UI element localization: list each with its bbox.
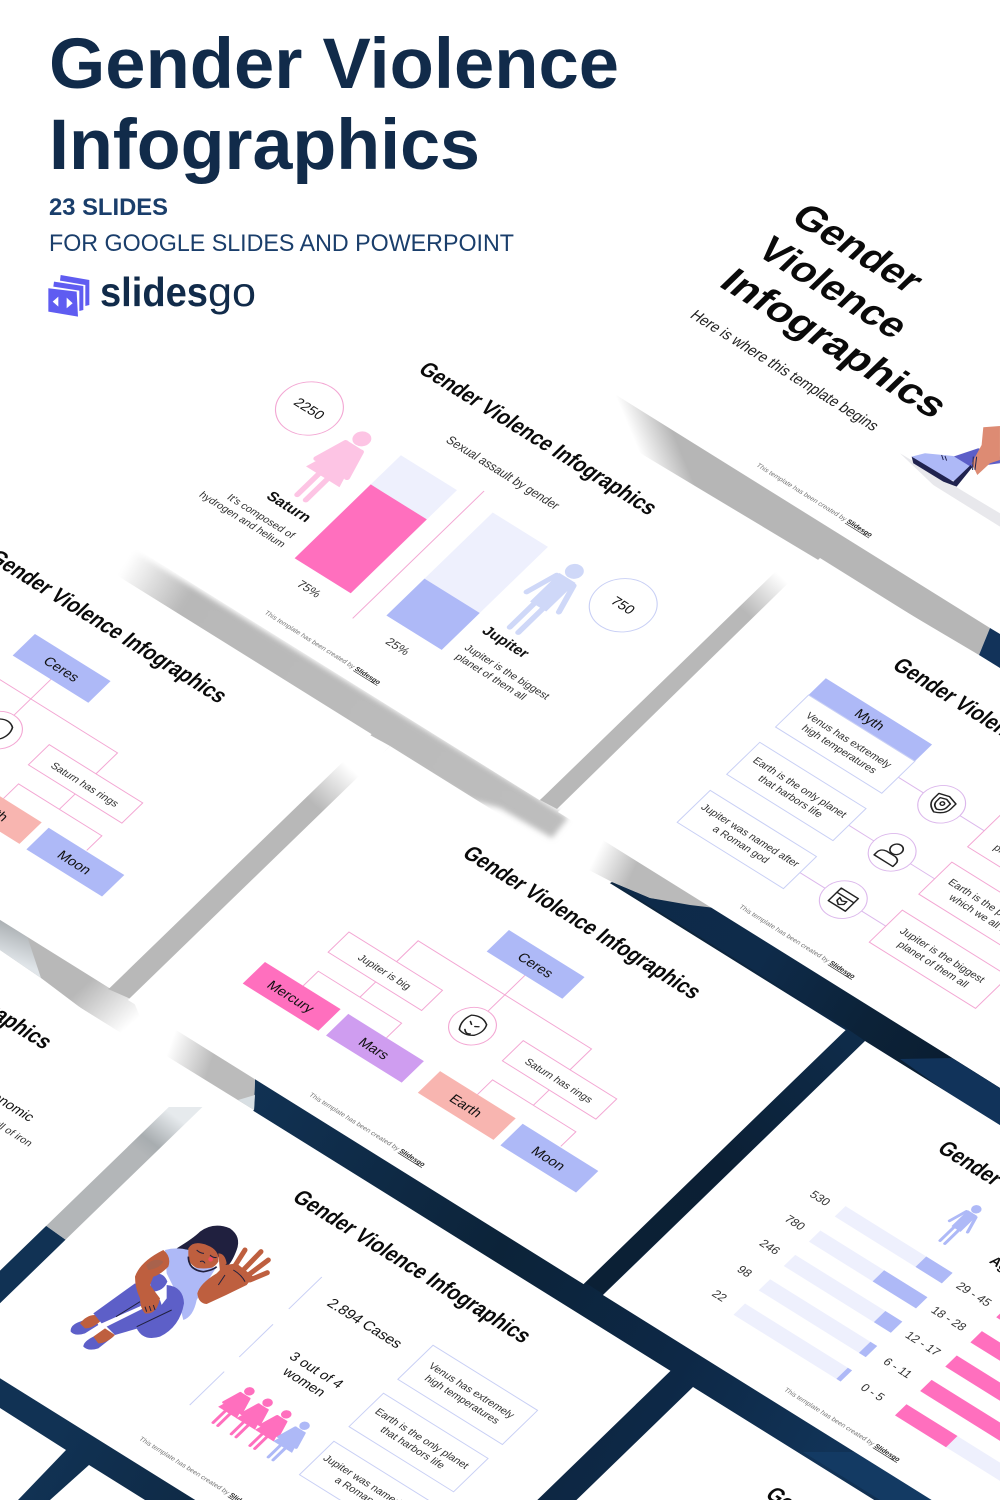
box myth header [809, 678, 932, 761]
slide title: Gender [783, 196, 932, 301]
bar chart left [734, 1206, 953, 1381]
subheading platforms: FOR GOOGLE SLIDES AND POWERPOINT [49, 230, 514, 257]
footer credit: This template has been created by Slidesgo [782, 1387, 901, 1463]
age labels [852, 1279, 995, 1407]
box Ceres: Ceres [514, 949, 557, 980]
box 3 [299, 1441, 438, 1500]
percent 25%: 25% [382, 635, 413, 658]
panel: slide age bars [603, 1041, 1000, 1500]
panel: slide bottom right partial [431, 1387, 1000, 1500]
panel: slide myth vs fact [558, 558, 1000, 1096]
shadow band under title slide [613, 393, 990, 655]
footer credit: This template has been created by Slidesgo [307, 1092, 426, 1168]
slide title: Gender Violence Infographics [458, 841, 708, 1003]
box Mars: Mars [355, 1035, 393, 1062]
subheading slide count: 23 SLIDES [49, 194, 168, 221]
heading: Infographics [49, 106, 480, 185]
box Mars [326, 1014, 424, 1083]
age labels: 18 - 28 [928, 1304, 970, 1333]
box 1: Venus has extremely [426, 1361, 518, 1421]
box Ceres: Ceres [40, 653, 83, 684]
panel: slide flow left [0, 450, 372, 988]
label Jupiter: planet of them all [452, 652, 529, 702]
bar: Saturn 75% [295, 455, 457, 593]
panel: slide flow center [128, 746, 846, 1284]
box myth 1: high temperatures [799, 723, 879, 776]
values: 98 [734, 1263, 756, 1280]
icon: shoe and hand illustration [900, 426, 1000, 527]
box 1 [398, 1345, 538, 1444]
panel: slide lower left partial [0, 796, 197, 1334]
box Ceres [13, 634, 111, 703]
stat 2.894 cases: 2.894 Cases [323, 1296, 406, 1352]
label Saturn: Saturn [262, 489, 315, 526]
box Moon: Moon [528, 1143, 569, 1173]
connectors [800, 777, 984, 926]
icon: man [498, 556, 596, 640]
grey shadow bands between slides [0, 530, 819, 1240]
box fact 3: planet of them all [894, 939, 971, 990]
values: 246 [756, 1237, 784, 1257]
connectors [303, 895, 654, 1146]
percent 75%: 75% [294, 578, 325, 600]
icon circle [0, 704, 32, 757]
box 2: that harbors life [377, 1424, 448, 1471]
value circle 750: 750 [608, 594, 639, 617]
panel: slide sexual assault by gender [84, 262, 802, 800]
box myth 1: Venus has extremely [803, 710, 895, 771]
box Moon [26, 828, 124, 897]
age labels: 12 - 17 [902, 1329, 944, 1359]
heading [49, 25, 619, 185]
value circle 2250: 2250 [290, 395, 329, 422]
connectors [0, 625, 180, 850]
box Saturn has rings: Saturn has rings [522, 1057, 595, 1105]
panel: slide bottom left corners [0, 1408, 145, 1500]
box Saturn has rings: Saturn has rings [48, 761, 121, 809]
navy accent top right [979, 628, 1000, 668]
values: 530 [807, 1188, 834, 1209]
values: 780 [781, 1212, 809, 1233]
subtitle: Sexual assault by gender [443, 433, 564, 512]
label Saturn [196, 462, 316, 550]
slide title: Infographics [711, 262, 957, 426]
icons: four people [207, 1383, 317, 1464]
age labels: 0 - 5 [857, 1381, 888, 1404]
box myth 3: a Roman god [710, 824, 772, 866]
label Jupiter [452, 623, 572, 711]
box Jupiter is big: Jupiter is big [355, 953, 414, 992]
panel: title slide [618, 195, 1000, 539]
box myth 1 [776, 695, 915, 793]
box myth 3 [677, 790, 816, 889]
icon: person [858, 826, 926, 879]
bar: Jupiter 25% [386, 512, 548, 650]
box Jupiter is big [328, 932, 442, 1010]
navy backdrop behind slides [0, 882, 1000, 1500]
box Ceres [487, 930, 585, 999]
logo icon [48, 275, 89, 317]
box myth 2: that harbors life [755, 773, 825, 820]
footer credit: This template has been created by Slidesgo [754, 462, 874, 539]
bar chart right [895, 1307, 1000, 1482]
logo wordmark: go [208, 269, 256, 315]
slide title: Gender Violence Infographics [288, 1185, 538, 1347]
box 1: high temperatures [422, 1373, 502, 1426]
box myth 3: Jupiter was named after [698, 802, 802, 870]
value circle 2250 [262, 371, 357, 446]
slide title: Violence [748, 230, 917, 346]
stat 3 out of 4 women [274, 1349, 347, 1403]
label Saturn: It's composed of [224, 492, 297, 541]
slide title: Gender Violence Infographics [414, 357, 664, 519]
box Mercury [243, 962, 341, 1031]
heading: Gender Violence [49, 25, 619, 104]
footer credit: This template has been created by Slidesgo [263, 610, 382, 686]
box Earth [418, 1071, 516, 1140]
text block [0, 1076, 54, 1149]
slide title [711, 195, 1000, 426]
box 2: Earth is the only planet [372, 1406, 471, 1471]
icon: man [933, 1201, 989, 1248]
box myth 2 [727, 742, 866, 841]
illustration: seated woman [71, 1226, 268, 1350]
box 2 [349, 1393, 488, 1492]
box fact 3 [869, 910, 1000, 1008]
box myth header: Myth [851, 706, 889, 733]
panel: slide statistics with woman [0, 1090, 671, 1500]
box fact 1 [968, 815, 1000, 913]
label Saturn: hydrogen and helium [196, 490, 288, 550]
dividers [190, 1277, 322, 1405]
box Mercury: Mercury [264, 977, 318, 1015]
value circle 750 [575, 568, 671, 643]
label Jupiter: Jupiter [478, 623, 533, 661]
icon: shield [908, 778, 975, 831]
age labels: 29 - 45 [953, 1279, 995, 1309]
box Earth [0, 775, 42, 844]
box Saturn has rings [28, 745, 143, 823]
box Earth: Earth [446, 1091, 486, 1120]
age labels: 6 - 11 [880, 1355, 916, 1381]
icon: document [810, 873, 877, 926]
divider [353, 491, 484, 618]
values: 22 [709, 1287, 731, 1304]
slide subtitle: Here is where this template begins [686, 308, 882, 434]
footer credit: This template has been created by Slidesgo [737, 904, 856, 980]
box Saturn has rings [502, 1041, 617, 1119]
logo wordmark: slides [100, 269, 208, 315]
box fact 3: Jupiter is the biggest [897, 926, 987, 985]
stat 3 out of 4 women: women [279, 1364, 329, 1399]
icon: woman [285, 423, 384, 507]
box myth 2: Earth is the only planet [750, 755, 849, 820]
values [706, 1188, 834, 1306]
box Moon [500, 1124, 598, 1193]
box fact 2 [919, 862, 1000, 960]
icon circle [439, 1000, 506, 1053]
box Moon: Moon [54, 847, 95, 877]
label Jupiter: Jupiter is the biggest [462, 643, 552, 702]
stat 3 out of 4 women: 3 out of 4 [286, 1349, 347, 1391]
